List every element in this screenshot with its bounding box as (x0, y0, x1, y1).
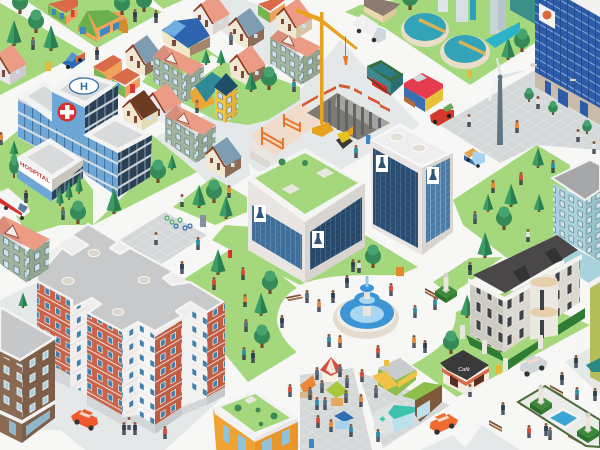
hospital: helipad roof (52, 70, 118, 107)
mansion: dark roof (473, 235, 578, 293)
formal garden with pool (518, 384, 600, 447)
house: teal roof (190, 72, 224, 110)
blue pickup truck (62, 52, 85, 69)
market stalls and shops (300, 357, 458, 436)
house: grey blue roof (228, 8, 265, 49)
shop: orange with green roof (78, 10, 128, 42)
apartment: white corner (122, 322, 155, 434)
roads: upper block lines (162, 55, 224, 98)
apartment: brick far right (207, 302, 225, 405)
trees: all lawn trees (6, 0, 544, 354)
house: big sage pink roof (153, 45, 204, 103)
ambulance (0, 188, 30, 220)
hospital: tower dark wall (85, 84, 118, 134)
mansion (460, 235, 585, 372)
house: left edge pink cottage (0, 44, 27, 85)
hospital: right annex (83, 115, 152, 197)
shop: upper right of houses (258, 0, 285, 23)
apartment: white recess right (182, 310, 207, 415)
shop: green with yellow awning (372, 358, 417, 396)
tea shop (367, 60, 403, 96)
icon: red cross (58, 102, 76, 122)
ground: paved plazas (120, 70, 600, 450)
light blue building right (552, 160, 600, 290)
safety barriers (302, 84, 390, 112)
water treatment plant (401, 0, 535, 69)
plaza planters (524, 88, 592, 134)
stall: orange tent (300, 375, 316, 398)
construction site (250, 8, 390, 170)
right olive building (586, 276, 600, 382)
mansion: hedges (466, 335, 505, 362)
orange car (430, 413, 458, 435)
house: blue roof (162, 18, 210, 60)
house: grey blue roof left (125, 35, 162, 76)
mansion: statues on plinths (460, 325, 543, 372)
hospital: tower wall with red cross (52, 92, 85, 146)
mansion: cornice (468, 254, 582, 302)
icon: helipad: H (80, 81, 88, 93)
shop: brown green roof (402, 382, 442, 422)
sign: hospital: HOSPITAL (20, 160, 50, 185)
apartment: cross shaped roof (37, 224, 223, 331)
lab tower right (370, 123, 453, 255)
wind turbine (488, 58, 525, 145)
tanks and pipes (438, 0, 535, 48)
white car (520, 355, 548, 377)
stall: green tent (326, 381, 349, 406)
orange building bottom with green roof (213, 390, 298, 450)
hospital (17, 70, 152, 202)
drones (531, 64, 576, 81)
red car lower left (71, 409, 98, 431)
house: blue grey roof lower (205, 137, 242, 178)
house: small pink roof brown wall (229, 45, 266, 86)
red pickup truck (430, 103, 454, 126)
house: big sage lower (165, 105, 216, 163)
lab building with green roof (248, 148, 365, 283)
house: pink roof sage top right (270, 27, 321, 85)
bicycle rack (165, 215, 206, 230)
stall: blue food stand (334, 411, 354, 429)
red roof shop (404, 73, 443, 112)
house: pink top (193, 0, 230, 35)
house: pink small centre (145, 83, 182, 124)
hospital: roof inner (60, 76, 110, 101)
apartment: brick centre left (87, 313, 122, 425)
apartment: brick right (155, 320, 182, 434)
apartment: upper wall fill (37, 224, 225, 417)
hospital: roof inset left (28, 86, 68, 112)
house: tall yellow (214, 73, 238, 123)
mansion: walls (470, 280, 503, 353)
house: dark brown roof (122, 90, 159, 131)
house: lower left pink roof (0, 216, 50, 283)
shop: colourful top (48, 0, 78, 25)
houses: residential neighbourhood (122, 0, 321, 178)
fountain (333, 276, 399, 339)
tower crane (296, 8, 358, 137)
excavator (336, 126, 353, 149)
clarifier tank 1 (401, 13, 449, 47)
stall: red striped tent (320, 357, 343, 382)
statue: garden (435, 272, 457, 303)
sign: cafe: Café (458, 367, 470, 373)
blue delivery truck (464, 148, 485, 168)
mansion: portico (530, 274, 558, 340)
excavation pit (307, 93, 390, 140)
clarifier tank 2 (440, 35, 490, 69)
hospital: left wing roof (18, 80, 85, 124)
hospital: main left wing glass wall (18, 98, 85, 172)
cafe (440, 350, 489, 395)
small shops beside hospital (93, 55, 140, 98)
apartment: brick wing left (37, 282, 70, 388)
right blue office building (535, 0, 600, 125)
brown apartment lower left (0, 307, 55, 443)
apartment: white recess (71, 290, 87, 395)
house: pink roof upper right corner (276, 0, 313, 39)
security kiosk and white truck (353, 0, 400, 43)
apartment block (37, 224, 225, 434)
apartment: roof vents (62, 249, 150, 316)
shop: pharmacy (374, 402, 415, 436)
beige pad and scaffolding (250, 103, 325, 170)
blue barrel (366, 135, 370, 144)
